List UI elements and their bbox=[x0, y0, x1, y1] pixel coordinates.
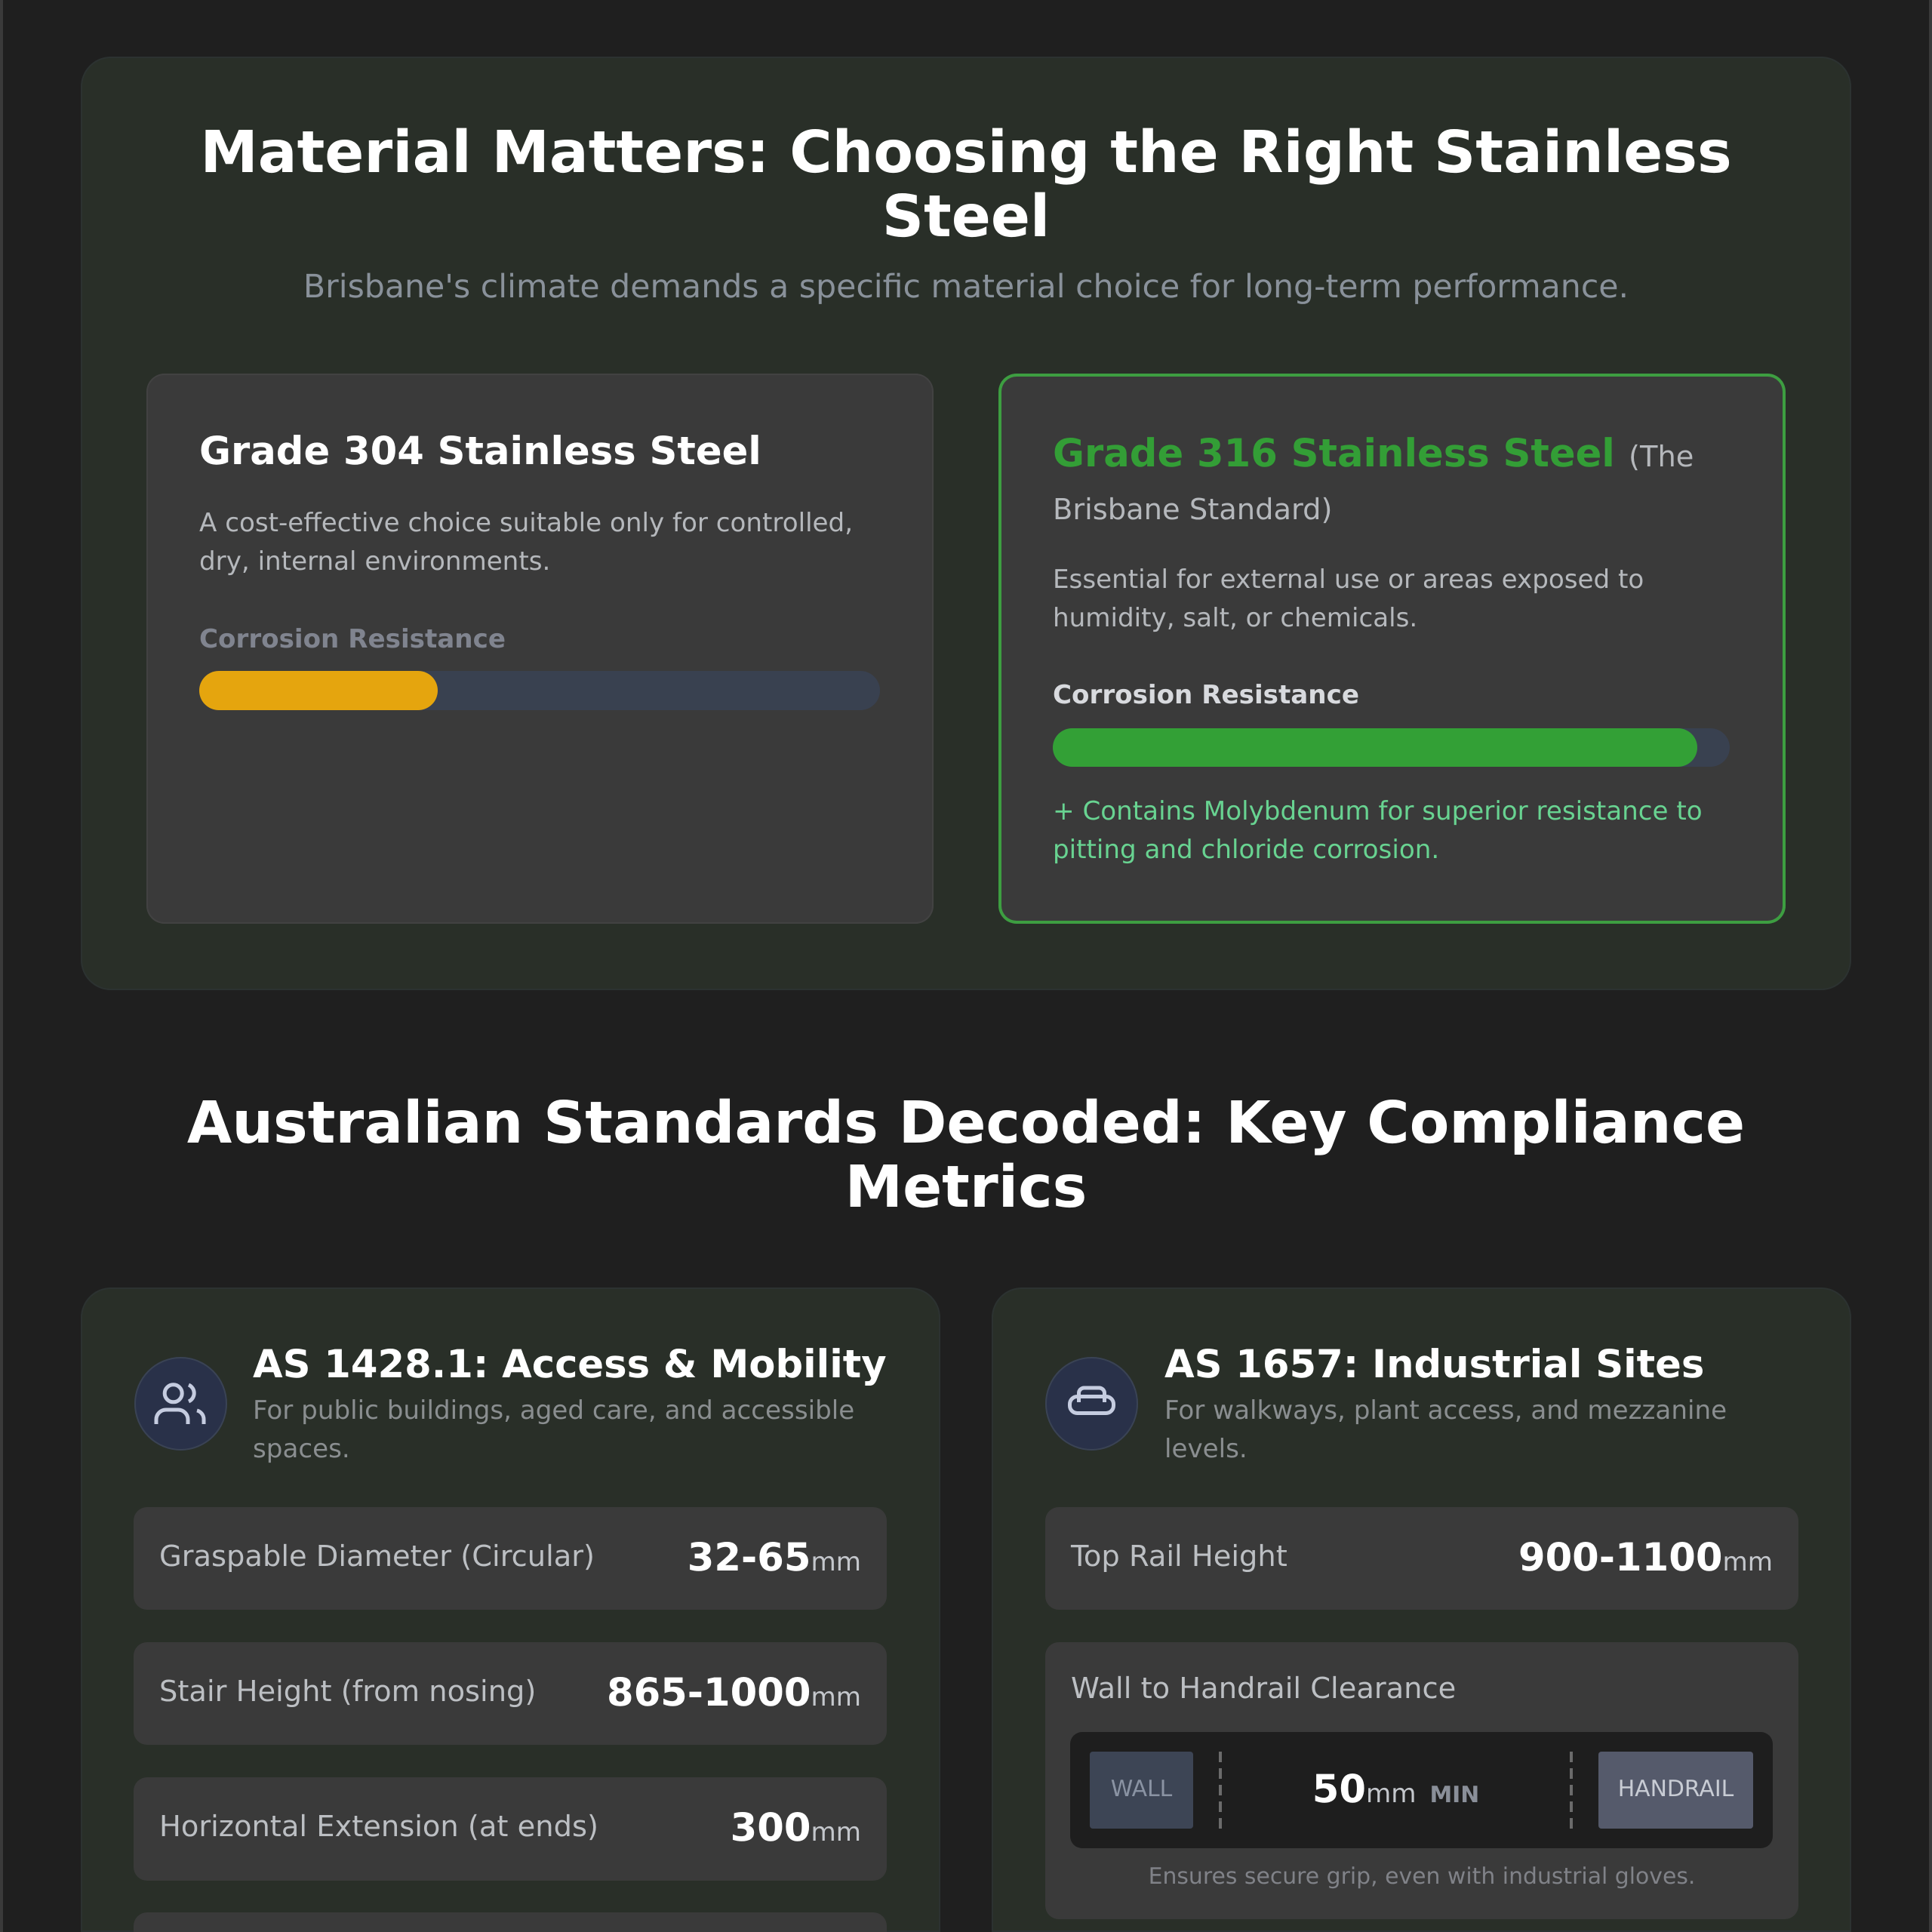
right dashed line bbox=[1570, 1752, 1573, 1829]
heading: material matters: Steel bbox=[882, 183, 1050, 251]
grade 316 heading: Brisbane Standard) bbox=[1053, 493, 1332, 527]
label: Stair Height (from nosing) bbox=[159, 1675, 536, 1709]
heading: material matters bbox=[200, 119, 1732, 251]
row: stair height bbox=[134, 1642, 887, 1745]
grade 316 description: Essential for external use or areas exposed to bbox=[1053, 565, 1644, 595]
icon: people bbox=[134, 1357, 227, 1451]
panel subheading: spaces. bbox=[253, 1434, 350, 1464]
panel: material comparison bbox=[81, 57, 1851, 990]
label: Horizontal Extension (at ends) bbox=[159, 1810, 598, 1844]
heading: australian standards: Australian Standards Decoded: Key Compliance bbox=[187, 1090, 1745, 1157]
left edge strip bbox=[0, 0, 3, 1932]
label: Top Rail Height bbox=[1071, 1540, 1287, 1574]
panel subheading: For walkways, plant access, and mezzanine bbox=[1164, 1395, 1727, 1425]
molybdenum note: pitting and chloride corrosion. bbox=[1053, 835, 1439, 865]
bar fill: 35 percent bbox=[199, 671, 438, 710]
left dashed line bbox=[1219, 1752, 1222, 1829]
clearance value: 50mm MIN bbox=[1312, 1767, 1479, 1812]
molybdenum note: + Contains Molybdenum for superior resistance to bbox=[1053, 795, 1703, 826]
wall block: WALL bbox=[1111, 1776, 1172, 1802]
grade 316 heading bbox=[1053, 431, 1694, 527]
grade 316 resistance bar bbox=[1053, 728, 1730, 767]
handrail block: HANDRAIL bbox=[1618, 1776, 1734, 1802]
grade 304 description: A cost-effective choice suitable only for controlled, bbox=[199, 507, 853, 537]
value: 865-1000mm bbox=[607, 1670, 861, 1715]
value: 900-1100mm bbox=[1518, 1535, 1773, 1580]
panel: AS 1428.1 bbox=[81, 1287, 940, 1932]
label: Wall to Handrail Clearance bbox=[1071, 1672, 1456, 1706]
grade 316 heading: Grade 316 Stainless Steel (The bbox=[1053, 431, 1694, 476]
row: clipped next row bbox=[134, 1912, 887, 1932]
grade 304 resistance bar bbox=[199, 671, 880, 710]
panel subheading bbox=[1164, 1395, 1727, 1464]
clearance caption: Ensures secure grip, even with industrial gloves. bbox=[1149, 1863, 1695, 1890]
icon: handrail bbox=[1045, 1357, 1138, 1451]
subtitle: Brisbane's climate demands a specific material choice for long-term performance. bbox=[303, 268, 1629, 306]
grade 316 description bbox=[1053, 565, 1644, 632]
row: top rail height bbox=[1045, 1507, 1798, 1610]
row: graspable diameter bbox=[134, 1507, 887, 1610]
right edge strip bbox=[1929, 0, 1932, 1932]
grade 316 description: humidity, salt, or chemicals. bbox=[1053, 602, 1417, 632]
card: grade 304 bbox=[146, 374, 934, 924]
card: grade 316 bbox=[998, 374, 1786, 924]
clearance diagram bbox=[1070, 1732, 1773, 1848]
handrail block bbox=[1598, 1752, 1753, 1829]
panel subheading bbox=[253, 1395, 854, 1464]
panel heading: AS 1428.1: Access & Mobility bbox=[253, 1342, 887, 1387]
panel heading: AS 1657: Industrial Sites bbox=[1164, 1342, 1704, 1387]
panel subheading: For public buildings, aged care, and accessible bbox=[253, 1395, 854, 1425]
grade 316 resistance label: Corrosion Resistance bbox=[1053, 680, 1359, 710]
grade 304 resistance label: Corrosion Resistance bbox=[199, 624, 506, 654]
value: 300mm bbox=[731, 1805, 861, 1850]
wall block bbox=[1090, 1752, 1193, 1829]
value: 32-65mm bbox=[688, 1535, 861, 1580]
molybdenum note bbox=[1053, 795, 1703, 865]
grade 304 description: dry, internal environments. bbox=[199, 546, 550, 577]
heading: australian standards bbox=[187, 1090, 1745, 1221]
bar fill: 95 percent bbox=[1053, 728, 1697, 767]
heading: material matters: Material Matters: Choosing the Right Stainless bbox=[200, 119, 1732, 186]
panel subheading: levels. bbox=[1164, 1434, 1247, 1464]
panel: AS 1657 bbox=[992, 1287, 1851, 1932]
grade 304 heading: Grade 304 Stainless Steel bbox=[199, 429, 761, 474]
heading: australian standards: Metrics bbox=[845, 1154, 1087, 1221]
row: wall to handrail clearance bbox=[1045, 1642, 1798, 1919]
row: horizontal extension bbox=[134, 1777, 887, 1881]
grade 304 description bbox=[199, 507, 853, 577]
label: Graspable Diameter (Circular) bbox=[159, 1540, 595, 1574]
